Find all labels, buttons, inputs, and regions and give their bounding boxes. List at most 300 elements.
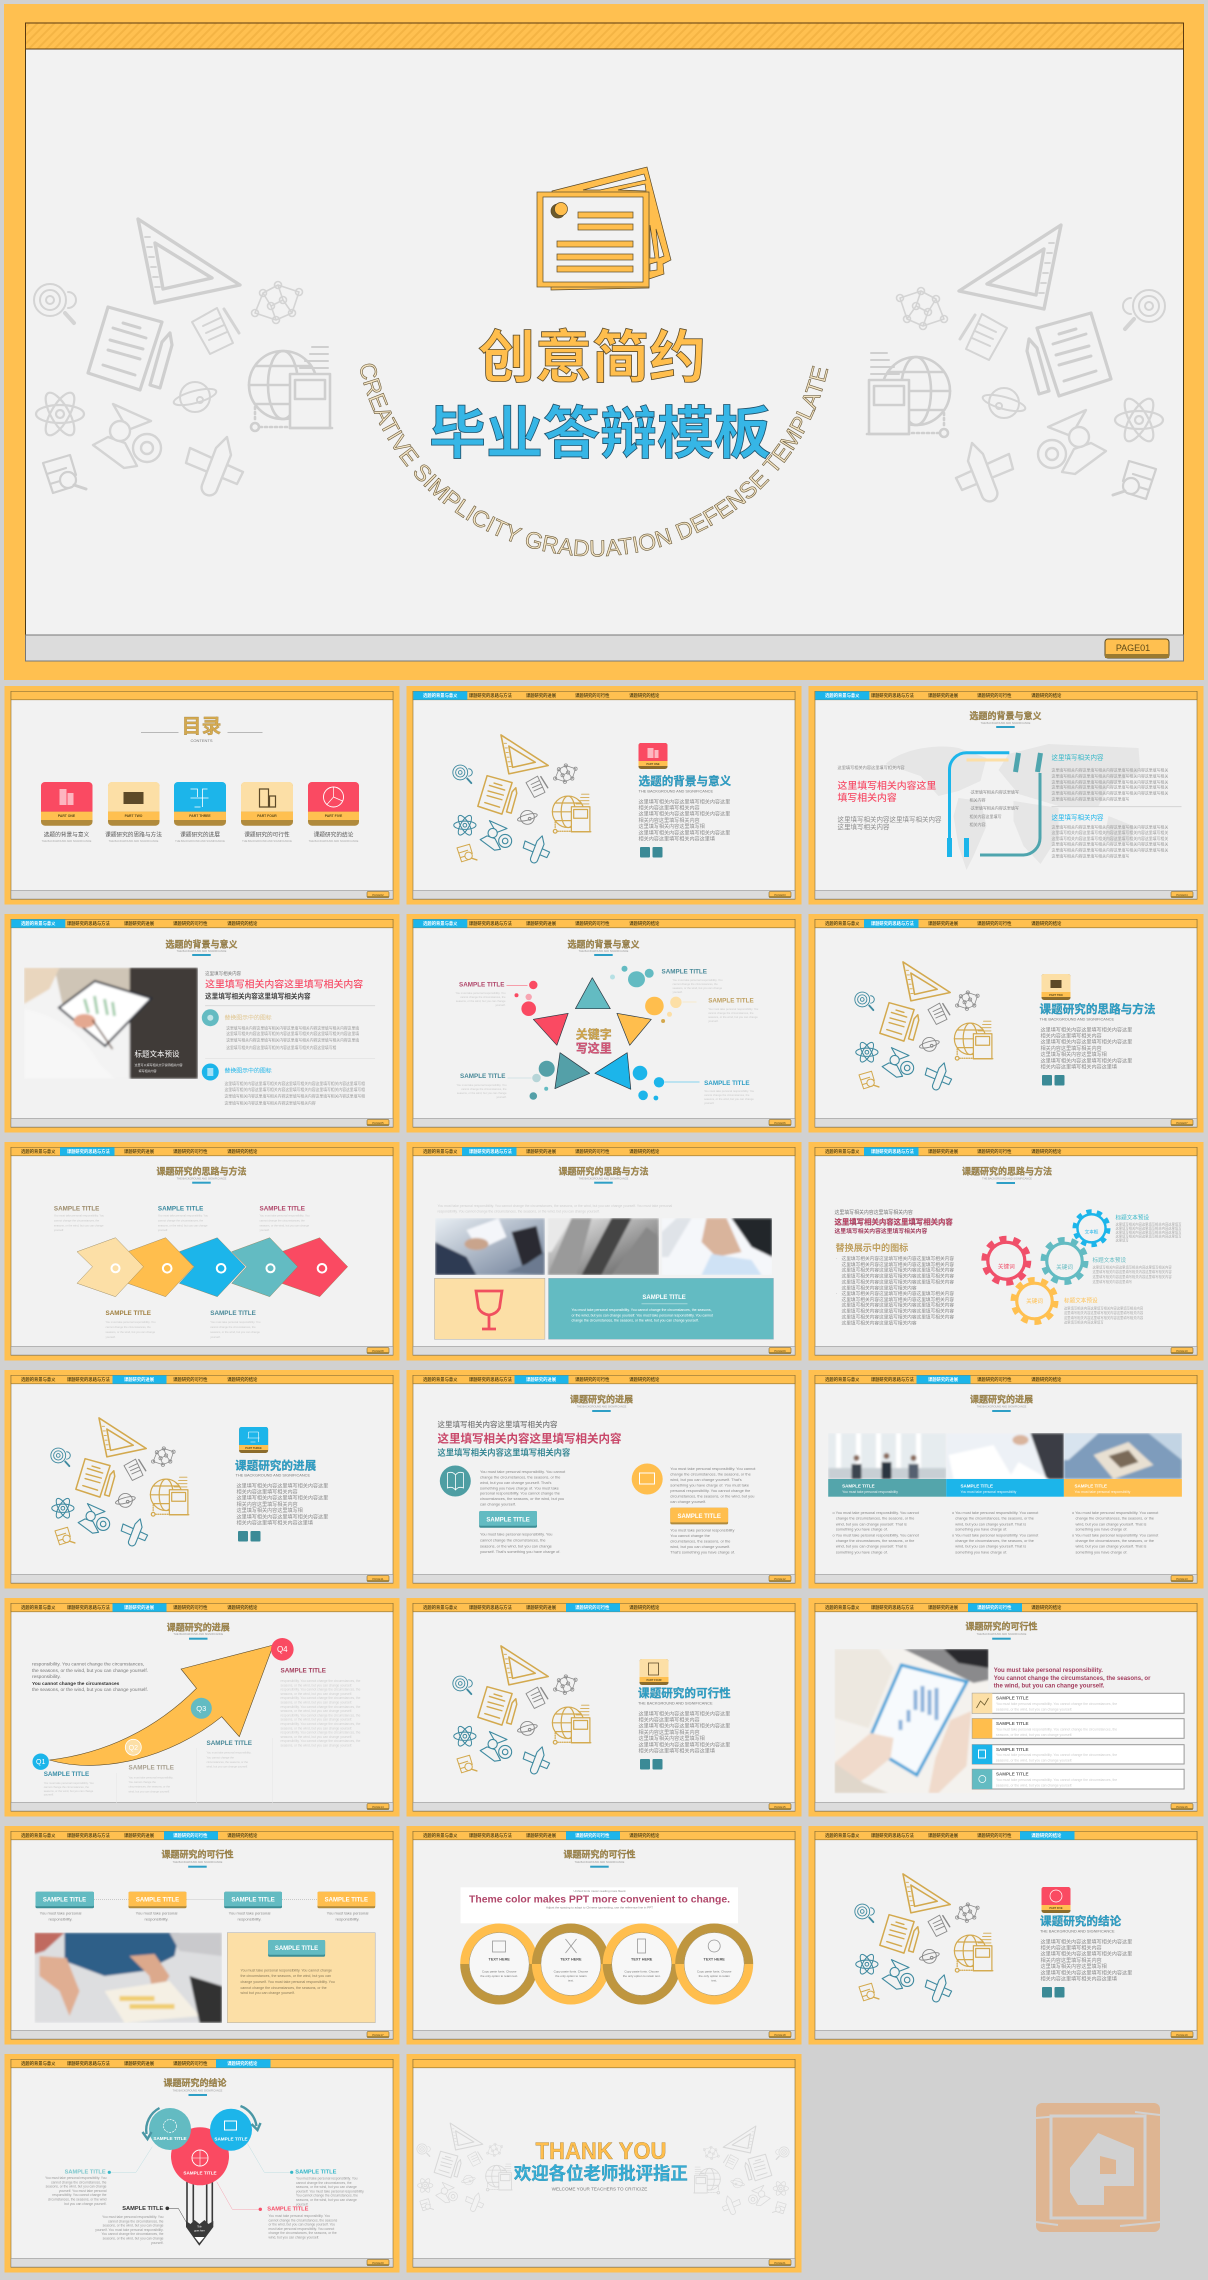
star center text <box>576 1027 612 1056</box>
section body: 这里填写相关内容这里填写相 <box>236 1507 303 1514</box>
part titles: 课题研究的可行性 <box>244 830 290 838</box>
sample title: bottom right: cannot change the circumstances, the <box>704 1093 750 1097</box>
nav tabs: 课题研究的可行性 <box>173 1376 208 1383</box>
small buttons <box>1042 1075 1064 1086</box>
list item 1: seasons, or the wind, but you can change yourself. <box>996 1708 1072 1712</box>
left column text: You must take personal responsibility. You cannot <box>480 1469 566 1474</box>
part cards: PART TWO <box>125 814 143 818</box>
small buttons <box>640 1759 662 1770</box>
bullet columns: wind, but you can change yourself. That is <box>1076 1522 1146 1526</box>
ring descriptions: Copy paste fonts. Choose <box>624 1970 659 1974</box>
star center text: 关键字 <box>576 1027 612 1042</box>
label Q4: responsibility. You cannot change the circumstances, the <box>280 1739 361 1743</box>
label: dark: yourself. You must take personal responsibility. <box>95 2228 164 2232</box>
section body: 相关内容这里填写相关内容 <box>236 1501 298 1508</box>
button: yellow: SAMPLE TITLE <box>678 1514 721 1520</box>
curved arrow: right <box>240 2106 260 2130</box>
gear label: blue <box>1116 1214 1182 1242</box>
right text: 这里填写相关内容这里填写相关内容这里填写相关内容这里填写相关 <box>1052 842 1168 847</box>
ring descriptions: text. <box>568 1978 574 1982</box>
flow buttons: SAMPLE TITLE <box>43 1898 86 1904</box>
section body: 这里填写相关内容这里填写相关内容这里 <box>1040 1026 1132 1033</box>
part titles <box>44 830 354 838</box>
label: red: or the wind, but you can change yourself. You <box>268 2223 335 2227</box>
slide 5: photo and text <box>4 914 400 1132</box>
label Q1: cannot change the circumstances, the <box>44 1785 89 1789</box>
right text: 这里填写相关内容这里填写相关内容这里填写相关内容这里填写相关 <box>1052 824 1168 829</box>
gear: red: 关键词 <box>998 1263 1015 1271</box>
section body: 这里填写相关内容这里填写相关内容这里 <box>236 1514 328 1520</box>
right column text: circumstances, the seasons, or the <box>670 1539 730 1544</box>
slide heading: THE BACKGROUND AND SIGNIFICANCE <box>173 1860 223 1864</box>
slide 14: rising arrow <box>4 1598 400 1816</box>
list item 3: You must take personal responsibility. You cannot change the circumstances, the <box>996 1753 1117 1757</box>
icon cluster <box>453 735 591 863</box>
slide 11: section three <box>4 1370 400 1588</box>
contents heading: 目录 <box>182 715 222 738</box>
label: right: yourself. You must take personal responsibility. <box>296 2189 364 2193</box>
sample title: right: seasons, or the wind, but you can change <box>708 1015 758 1019</box>
left text: 这里填写相关内容这里填写相关内容 <box>838 764 905 771</box>
left bullets: 这里填写相关内容这里填写相关内容这里填写相关内容 <box>842 1267 954 1274</box>
button: teal: SAMPLE TITLE <box>486 1518 530 1524</box>
photo: tablet and hand <box>24 968 198 1079</box>
nav tabs: 选题的背景与意义 <box>423 1832 458 1839</box>
left column text: can change yourself. <box>480 1501 516 1506</box>
section badge: PART FIVE <box>1049 1906 1063 1910</box>
connector lines <box>109 2143 292 2222</box>
bullet columns: change the circumstances, the seasons, or the <box>836 1517 914 1521</box>
gear label: yellow: 这里填写相关内容这里填写相关内容这里填写相关内容 <box>1064 1306 1144 1310</box>
labels above <box>54 1206 310 1232</box>
icon cluster <box>855 962 993 1090</box>
slide 17: flow and photo <box>4 1826 400 2044</box>
slide heading <box>563 1848 636 1868</box>
nav tabs: 课题研究的结论 <box>629 692 660 699</box>
section body: 相关内容这里填写相关内容 <box>236 1488 298 1495</box>
nav tabs <box>21 1603 258 1612</box>
labels above: SAMPLE TITLE <box>54 1206 99 1212</box>
red statement: You cannot change the circumstances, the seasons, or <box>994 1676 1151 1682</box>
right text: 这里填写相关内容这里填写相关内容这里填写 <box>1052 853 1129 858</box>
ring centers <box>469 1932 744 1996</box>
nav tabs: 课题研究的进展 <box>526 692 557 699</box>
nav tabs <box>423 1147 660 1156</box>
right column text: change the circumstances, the seasons, or the <box>670 1472 751 1476</box>
hero page badge: PAGE01 <box>1116 643 1150 653</box>
sample title: top right: SAMPLE TITLE <box>662 968 707 976</box>
gear label: teal: 标题文本预设 <box>1092 1256 1126 1264</box>
item 1: 替换图示中的图标 <box>224 1014 272 1022</box>
right column text: You cannot change the <box>670 1533 710 1538</box>
sample title: bottom left: SAMPLE TITLE <box>460 1073 505 1080</box>
section badge: PART ONE <box>646 762 660 766</box>
label Q4: seasons, or the wind, but you can change yourself. <box>280 1718 352 1722</box>
section body: 相关内容这里填写相关内容 <box>1040 1045 1102 1052</box>
gear label: yellow: 这里填写相关内容这里填写 <box>1064 1320 1104 1324</box>
section body: 这里填写相关内容这里填写相关内容这里 <box>236 1494 328 1502</box>
slide heading: 课题研究的进展 <box>570 1393 633 1404</box>
bullet columns: change the circumstances, the seasons, or the <box>836 1539 914 1543</box>
nav tabs: 课题研究的进展 <box>526 1376 557 1383</box>
labels below: SAMPLE TITLE <box>210 1310 256 1317</box>
slide heading: THE BACKGROUND AND SIGNIFICANCE <box>579 1176 629 1180</box>
left column text: something you have charge of. You must take <box>480 1485 559 1490</box>
caption strips: You must take personal responsibility <box>1074 1490 1131 1494</box>
nav tabs: 课题研究的结论 <box>1031 1148 1062 1155</box>
left column text: cannot change the circumstances, the <box>480 1537 546 1542</box>
part subtitles <box>42 839 359 843</box>
teal box: SAMPLE TITLE <box>642 1295 686 1301</box>
sample title: bottom right: SAMPLE TITLE <box>704 1080 750 1087</box>
right intro text: 这里填写相关内容这里填写相关内容 <box>205 977 363 990</box>
hero page badge <box>1105 639 1169 658</box>
photo: hands on charts <box>34 1933 222 2023</box>
labels above: yourself. <box>54 1228 64 1232</box>
ring descriptions: the only option to retain <box>699 1974 730 1978</box>
slide 15: section four <box>406 1598 802 1816</box>
curved arrow: left <box>142 2108 160 2139</box>
nav tabs: 课题研究的结论 <box>1031 920 1062 927</box>
label Q1: yourself. <box>44 1793 54 1797</box>
bullet columns: wind, but you can change yourself. That is <box>836 1522 907 1526</box>
label: red: cannot change the circumstances, the seasons <box>268 2218 338 2222</box>
sample title: bottom left <box>456 1073 532 1099</box>
nav tabs: 选题的背景与意义 <box>423 1376 458 1383</box>
gear label: teal: 这里填写相关内容这里填写相关内容这里填写相关内容 <box>1092 1264 1172 1270</box>
hero footer band <box>26 635 1184 661</box>
nav tabs: 课题研究的可行性 <box>173 1832 208 1839</box>
nav tabs <box>825 919 1062 928</box>
slide 16: tablet and list <box>808 1598 1204 1816</box>
labels above: seasons, or the wind, but you can change <box>54 1224 104 1228</box>
part titles: 课题研究的结论 <box>314 830 354 838</box>
slide 7: section two: PAGE07 <box>1176 1121 1188 1125</box>
nav tabs: 课题研究的可行性 <box>575 1604 610 1611</box>
sample title: top left: SAMPLE TITLE <box>459 982 504 988</box>
bullet columns: something you have charge of. <box>955 1550 1007 1554</box>
caption strips <box>828 1479 1182 1497</box>
item 1: 这里填写相关内容这里填写相关内容这里填写相关内容这里填写相关内容这里填 <box>226 1038 359 1043</box>
photo: tablet chart <box>834 1649 988 1793</box>
icon cluster <box>453 1646 591 1774</box>
ring descriptions: text. <box>711 1978 717 1982</box>
nav tabs: 课题研究的思路与方法 <box>469 1832 512 1839</box>
gear label: teal: 这里填写相关内容这里填写 <box>1092 1279 1133 1284</box>
labels above: seasons, or the wind, but you can change <box>158 1224 208 1228</box>
photo caption: 填写相关内容 <box>138 1068 157 1073</box>
slide heading: THE BACKGROUND AND SIGNIFICANCE <box>173 1632 223 1636</box>
icon circle: teal book <box>440 1466 471 1496</box>
list item 3 <box>972 1745 1184 1764</box>
intro text <box>438 1419 622 1457</box>
center bullets: 相关内容 <box>970 796 986 802</box>
left paragraph: You cannot change the circumstances <box>32 1681 120 1687</box>
left text: 这里填写相关内容 <box>838 822 890 831</box>
left bullets: 这里填写相关内容这里填写相关内容这里填写相关内容 <box>842 1302 954 1309</box>
milestone Q2 <box>125 1739 141 1755</box>
nav tabs: 课题研究的思路与方法 <box>67 1832 110 1839</box>
labels below: SAMPLE TITLE <box>106 1310 151 1317</box>
left bullets: 这里填写相关内容这里填写相关内容这里填写相关内容 <box>842 1278 954 1286</box>
cream text panel <box>227 1933 375 2023</box>
part titles: 课题研究的进展 <box>180 830 220 838</box>
hero slide: cover <box>4 4 1204 680</box>
sample title: top right <box>662 968 723 994</box>
slide heading: 课题研究的思路与方法 <box>962 1165 1052 1176</box>
left bullets: 这里填写相关内容这里填写相关内容这里填写相关内容 <box>842 1261 954 1268</box>
right column text: can change yourself. <box>670 1499 706 1504</box>
caption strips: SAMPLE TITLE <box>842 1483 875 1488</box>
bullet columns: something you have charge of. <box>836 1550 888 1554</box>
sample title: right: You must take personal responsibility. You <box>708 1007 759 1011</box>
sample title: bottom left: yourself. <box>496 1095 507 1099</box>
labels above: You must take personal responsibility. You <box>158 1214 208 1218</box>
nav tabs: 课题研究的可行性 <box>977 1604 1012 1611</box>
nav tabs: 课题研究的思路与方法 <box>469 1148 512 1155</box>
labels above: SAMPLE TITLE <box>158 1206 203 1212</box>
slide 16: tablet and list: PAGE16 <box>1176 1805 1188 1809</box>
part subtitles: THE BACKGROUND AND SIGNIFICANCE <box>175 839 225 843</box>
nav tabs: 课题研究的进展 <box>526 1832 557 1839</box>
item 2 <box>202 1064 365 1105</box>
section title: 课题研究的结论 <box>1040 1914 1122 1928</box>
slide heading: THE BACKGROUND AND SIGNIFICANCE <box>579 949 629 953</box>
slide 2: contents: PAGE02 <box>372 893 384 897</box>
gear label: blue: 这里填写 <box>1116 1238 1129 1242</box>
item 1 <box>202 1009 359 1050</box>
pencil <box>186 2182 213 2246</box>
milestone Q3: Q3 <box>196 1704 206 1713</box>
label Q4: seasons, or the wind, but you can change yourself. <box>280 1700 352 1704</box>
sample title: top right: yourself. <box>672 990 683 994</box>
nav tabs: 课题研究的思路与方法 <box>67 1376 110 1383</box>
labels above: You must take personal responsibility. You <box>260 1214 310 1218</box>
nav tabs <box>825 1603 1062 1612</box>
ring descriptions: Copy paste fonts. Choose <box>482 1970 517 1974</box>
nav tabs: 选题的背景与意义 <box>825 920 860 927</box>
caption strips: SAMPLE TITLE <box>1074 1483 1107 1488</box>
nav tabs: 选题的背景与意义 <box>825 1604 860 1611</box>
left bullets: 这里填写相关内容这里填写相关内容这里填写相关内容 <box>842 1314 954 1320</box>
nav tabs: 课题研究的结论 <box>629 1832 660 1839</box>
red circle <box>171 2127 229 2185</box>
intro text: 这里填写相关内容这里填写相关内容 <box>438 1431 622 1445</box>
nav tabs: 选题的背景与意义 <box>825 1832 860 1839</box>
part cards <box>41 782 359 826</box>
nav tabs: 课题研究的进展 <box>124 920 155 927</box>
flow captions: responsibility. <box>238 1917 261 1922</box>
label Q2 <box>128 1764 174 1793</box>
gear: teal <box>1043 1240 1086 1282</box>
nav tabs: 课题研究的可行性 <box>173 1148 208 1155</box>
label: right <box>290 2170 364 2206</box>
small buttons <box>1042 1987 1064 1998</box>
bullet columns: wind, but you can change yourself. That is <box>955 1545 1026 1549</box>
flow buttons <box>36 1892 375 1908</box>
nav tabs: 课题研究的结论 <box>227 1832 258 1839</box>
nav tabs: 课题研究的思路与方法 <box>871 1148 914 1155</box>
labels above: SAMPLE TITLE <box>260 1206 305 1212</box>
label Q4 <box>280 1667 361 1748</box>
slide heading <box>558 1165 649 1184</box>
label: left: SAMPLE TITLE <box>65 2170 106 2176</box>
sample title: right: cannot change the circumstances, the <box>708 1011 754 1015</box>
sample title: top left <box>455 982 528 1007</box>
icon cluster <box>51 1418 189 1546</box>
nav tabs: 课题研究的进展 <box>124 2060 155 2067</box>
section body: 相关内容这里填写相关内容 <box>1040 1032 1102 1039</box>
label: left <box>45 2170 111 2206</box>
slide heading: 选题的背景与意义 <box>969 710 1042 721</box>
right column text: something you have charge of. You must take <box>670 1482 749 1488</box>
left intro: 替换展示中的图标 <box>836 1242 908 1253</box>
nav tabs <box>413 919 660 928</box>
label: left: cannot change the circumstances, the <box>51 2180 107 2184</box>
white banner: Adjust the spacing to adapt to Chinese typesetting, use the reference line in PPT <box>546 1906 653 1910</box>
hero top hatched band <box>26 23 1184 49</box>
label: right: yourself. <box>296 2202 309 2206</box>
section body: 相关内容这里填写相关内容 <box>1040 1944 1102 1951</box>
sample title: bottom left: cannot change the circumstances, the <box>461 1087 507 1091</box>
nav tabs: 课题研究的进展 <box>928 920 959 927</box>
sample title: bottom right: You must take personal responsibility. You <box>704 1089 755 1093</box>
label Q4: seasons, or the wind, but you can change yourself. <box>280 1692 352 1696</box>
slide 3: section one: PAGE03 <box>774 893 786 897</box>
white banner: Unified fonts music reading more fluent <box>573 1889 626 1893</box>
left column text: seasons, or the wind, but you can change <box>480 1543 552 1548</box>
slide heading: THE BACKGROUND AND SIGNIFICANCE <box>575 1860 625 1864</box>
left paragraph: responsibility. You cannot change the circumstances, <box>32 1662 144 1668</box>
slide heading: 选题的背景与意义 <box>567 938 640 950</box>
label Q3: You must take personal responsibility. <box>206 1751 252 1755</box>
nav tabs: 课题研究的思路与方法 <box>871 1604 914 1611</box>
list item 3: seasons, or the wind, but you can change yourself. <box>996 1758 1072 1762</box>
flow connectors <box>94 1898 318 1900</box>
section subtitle: THE BACKGROUND AND SIGNIFICANCE <box>1040 1928 1115 1933</box>
item 1: 这里填写相关内容这里填写相关内容这里填写相关内容这里填写相 <box>226 1045 337 1050</box>
section title: 课题研究的进展 <box>235 1458 317 1472</box>
slide heading: 课题研究的可行性 <box>965 1620 1038 1631</box>
nav tabs: 课题研究的结论 <box>1031 1832 1062 1839</box>
nav tabs: 课题研究的思路与方法 <box>67 1604 110 1611</box>
label: left: yourself. You must take personal <box>59 2189 107 2193</box>
nav tabs: 课题研究的思路与方法 <box>469 1376 512 1383</box>
label: right: You must take personal responsibility. You <box>296 2176 358 2180</box>
nav tabs: 选题的背景与意义 <box>21 1148 56 1155</box>
center bullets: 相关内容这里填写 <box>970 813 1002 819</box>
nav tabs: 选题的背景与意义 <box>423 1148 458 1155</box>
right column text: circumstances, the seasons, or the wind, but you <box>670 1494 754 1498</box>
slide heading <box>970 1393 1033 1412</box>
nav tabs: 课题研究的结论 <box>1031 1604 1062 1611</box>
left bullets: 这里填写相关内容这里填写相关内容这里填写相关内容 <box>842 1273 954 1280</box>
section body: 这里填写相关内容这里填写相关内容这里 <box>638 830 730 836</box>
center bullets: ·这里填写相关内容这里填写 <box>970 804 1019 810</box>
right text: 这里填写相关内容 <box>1052 753 1104 762</box>
nav tabs: 课题研究的进展 <box>928 1604 959 1611</box>
nav tabs: 课题研究的进展 <box>526 1604 557 1611</box>
slide 21: thank you <box>406 2054 802 2272</box>
nav tabs: 课题研究的可行性 <box>977 920 1012 927</box>
right text <box>1052 753 1182 858</box>
hero icon cluster left <box>34 219 332 495</box>
list item 1 <box>972 1693 1184 1713</box>
slide 8: arrow process: PAGE08 <box>372 1349 384 1353</box>
milestone Q1 <box>32 1754 49 1770</box>
item 1: 这里填写相关内容这里填写相关内容这里填写相关内容这里填写相关内容这里填 <box>226 1031 359 1036</box>
section body: 相关内容这里填写相关内容这里填 <box>236 1520 313 1526</box>
hero title line 2: 毕业答辩模板 <box>429 402 771 466</box>
intro text: 这里填写相关内容这里填写相关内容 <box>438 1447 571 1457</box>
nav tabs: 课题研究的可行性 <box>173 1604 208 1611</box>
slide heading: THE BACKGROUND AND SIGNIFICANCE <box>981 721 1031 725</box>
nav tabs: 课题研究的进展 <box>124 1376 155 1383</box>
part titles: 选题的背景与意义 <box>44 830 90 838</box>
slide 18: rings <box>406 1826 802 2044</box>
section body: 相关内容这里填写相关内容 <box>638 1729 700 1736</box>
bullet columns: something you have charge of. <box>836 1528 888 1532</box>
nav tabs: 选题的背景与意义 <box>21 1832 56 1839</box>
gear label: yellow <box>1064 1297 1144 1324</box>
sample title: top left: yourself. <box>495 1003 506 1007</box>
labels below: cannot change the circumstances, the <box>106 1325 151 1329</box>
right column text: That's something you have charge of. <box>670 1550 735 1555</box>
left column text: yourself. That's something you have charge of. <box>480 1549 560 1554</box>
milestone Q2: Q2 <box>129 1745 138 1752</box>
right text: 这里填写相关内容这里填写相关内容这里填写相关内容这里填写相关 <box>1052 791 1168 796</box>
slide heading <box>567 938 640 956</box>
cream text panel: change yourself. You must take personal responsibility. You <box>240 1980 335 1984</box>
nav tabs: 课题研究的思路与方法 <box>469 1604 512 1611</box>
section body: 相关内容这里填写相关内容这里填 <box>638 1748 715 1754</box>
slide 4: map quote <box>808 686 1204 904</box>
slide heading <box>962 1165 1052 1184</box>
right column text: wind, but you can change yourself. That's <box>670 1477 742 1482</box>
bullet columns: wind, but you can change yourself. That is <box>955 1522 1026 1526</box>
cream box with trophy <box>434 1278 545 1339</box>
labels below: yourself. <box>106 1335 116 1339</box>
nav tabs: 课题研究的结论 <box>227 920 258 927</box>
white banner <box>460 1887 738 1923</box>
section title: 课题研究的思路与方法 <box>1040 1002 1156 1016</box>
section body: 这里填写相关内容这里填写相关内容这里 <box>1040 1038 1132 1046</box>
slide heading: 课题研究的进展 <box>167 1621 230 1632</box>
left column text <box>480 1469 566 1554</box>
left bullets: · <box>836 1291 837 1296</box>
label Q4: seasons, or the wind, but you can change yourself. <box>280 1726 352 1730</box>
contents heading: CONTENTS <box>190 738 213 743</box>
left text: 填写相关内容 <box>838 791 897 804</box>
slide 15: section four: PAGE15 <box>774 1805 786 1809</box>
nav tabs: 选题的背景与意义 <box>825 692 860 699</box>
thank you title: THANK YOU <box>536 2138 666 2165</box>
label Q4: responsibility. You cannot change the circumstances, the <box>280 1696 361 1700</box>
section badge: PART THREE <box>245 1446 262 1450</box>
label: red: change the circumstances, the seasons, or the <box>268 2231 337 2235</box>
section body: 这里填写相关内容这里填写相 <box>1040 1051 1107 1058</box>
nav tabs: 课题研究的进展 <box>124 1604 155 1611</box>
labels below <box>106 1310 261 1339</box>
slide 6: star diagram: PAGE06 <box>774 1121 786 1125</box>
label Q2: SAMPLE TITLE <box>128 1764 174 1771</box>
label: dark: yourself. <box>151 2241 164 2245</box>
list item 2: SAMPLE TITLE <box>996 1721 1028 1726</box>
slide heading <box>161 1848 234 1868</box>
label: red: must take personal responsibility. You cannot <box>268 2227 334 2231</box>
labels below: cannot change the circumstances, the <box>210 1325 256 1329</box>
left intro <box>834 1209 953 1253</box>
